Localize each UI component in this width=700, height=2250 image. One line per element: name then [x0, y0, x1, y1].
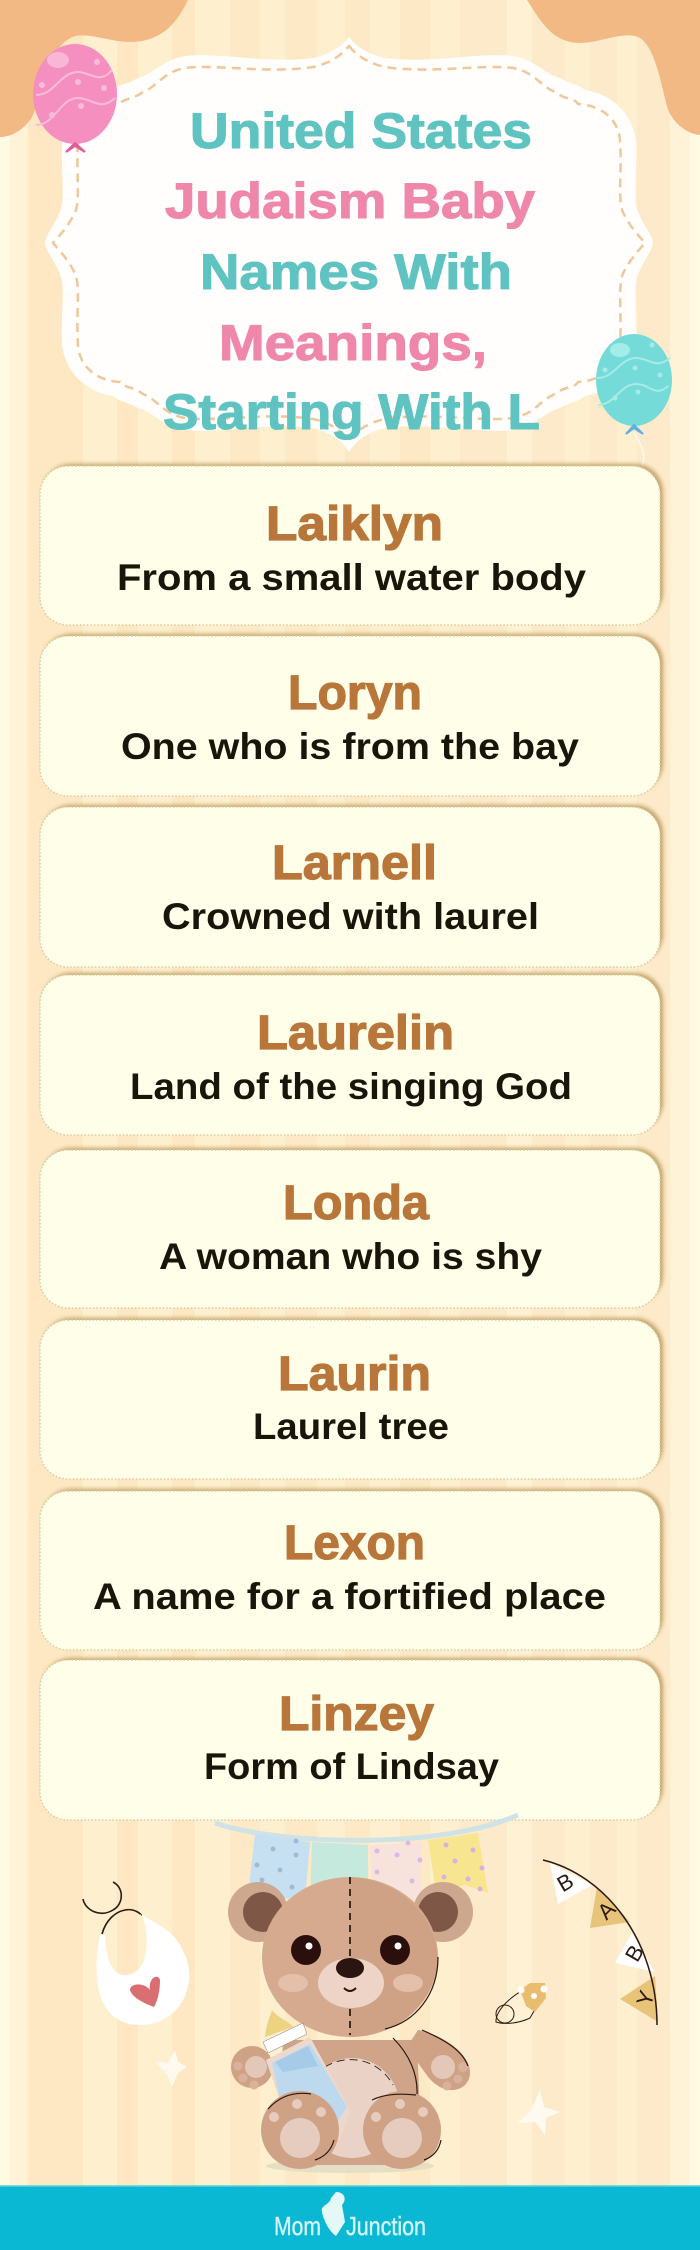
card: Laiklyn: Laiklyn [266, 498, 443, 551]
card: Laurelin [40, 973, 663, 1135]
title [163, 103, 540, 440]
card: Londa: Londa [283, 1177, 429, 1230]
card: Londa: A woman who is shy [159, 1236, 542, 1277]
icon: baby bottle [263, 2010, 350, 2140]
card: Lexon: Lexon [284, 1517, 425, 1570]
icon: baby banner [543, 1860, 660, 2025]
card: Laurin: Laurel tree [253, 1406, 449, 1447]
card: Loryn [40, 634, 663, 796]
icon: star left [155, 2050, 187, 2087]
footer logo [274, 2192, 426, 2241]
card: Laurin: Laurin [278, 1348, 431, 1401]
card: Laiklyn [40, 464, 663, 625]
title frame [45, 37, 653, 452]
title: Names With [200, 244, 512, 300]
icon: teal balloon [596, 334, 672, 475]
icon: baby banner: Y [631, 1987, 660, 2009]
card: Larnell: Larnell [272, 837, 437, 890]
icon: teddy bear [228, 1877, 473, 2173]
card: Linzey: Linzey [279, 1688, 434, 1741]
card: Larnell [40, 805, 663, 967]
icon: baby banner: B [553, 1868, 578, 1897]
card: Laurin [40, 1318, 663, 1479]
card: Laurelin: Land of the singing God [130, 1066, 572, 1107]
curtain: right [527, 0, 700, 135]
bunting garland [215, 1815, 518, 1900]
title: United States [190, 103, 532, 159]
footer logo: Junction [346, 2211, 426, 2241]
card: Lexon [40, 1489, 663, 1650]
icon: safety pin [496, 1983, 548, 2023]
card: Lexon: A name for a fortified place [93, 1576, 606, 1617]
card: Larnell: Crowned with laurel [162, 896, 539, 937]
icon: baby banner: B [620, 1941, 649, 1966]
icon: bib [83, 1882, 189, 2025]
card: Loryn: One who is from the bay [121, 726, 579, 767]
card: Laiklyn: From a small water body [117, 557, 586, 598]
icon: star right [517, 2090, 560, 2135]
card: Loryn: Loryn [288, 667, 422, 720]
title: Starting With L [163, 384, 540, 440]
card: Linzey: Form of Lindsay [204, 1746, 499, 1787]
card: Londa [40, 1148, 663, 1308]
card: Laurelin: Laurelin [257, 1007, 454, 1060]
icon: pink balloon [33, 44, 117, 152]
footer bar [0, 2185, 700, 2250]
title: Judaism Baby [165, 173, 535, 229]
title: Meanings, [219, 315, 487, 371]
icon: baby banner: A [592, 1896, 621, 1924]
curtain: left [0, 0, 188, 137]
footer logo: Mom [274, 2211, 321, 2241]
card: Linzey [40, 1658, 663, 1820]
